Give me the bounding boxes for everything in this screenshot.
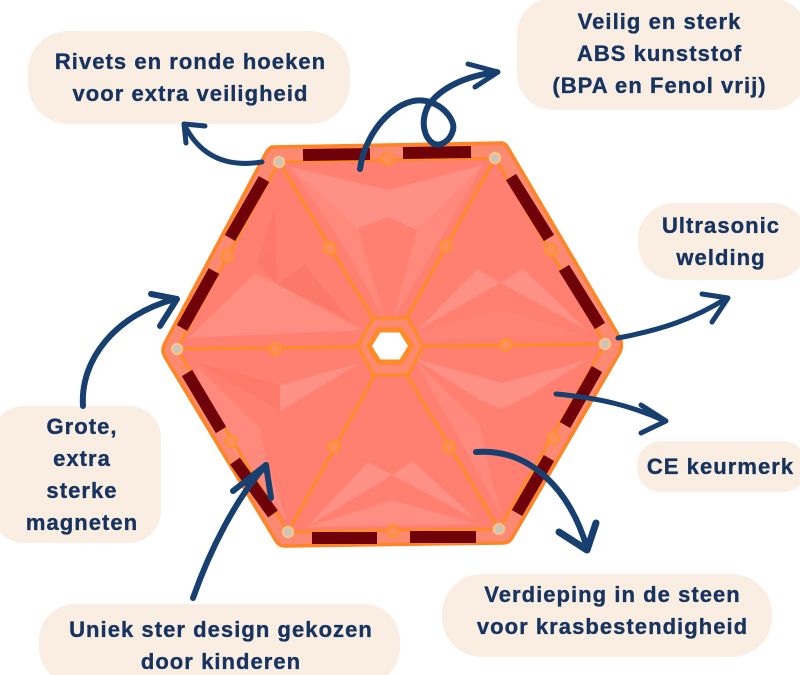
arrow: scratch resistance [476,452,596,550]
tile face [177,158,605,532]
callout: star design: door kinderen [141,648,301,674]
tile outer frame [163,143,622,546]
callout: magnets: sterke [46,478,118,503]
darker facets [198,207,350,411]
callout: magnets: Grote, [46,414,118,439]
callout: CE [637,441,800,492]
callout: CE: CE keurmerk [647,454,794,478]
rivets [172,153,610,537]
callout: star design: Uniek ster design gekozen [69,616,373,642]
callout: ABS [517,0,800,110]
callout: ABS: Veilig en sterk [578,9,741,34]
arrow: ultrasonic [618,294,728,338]
callout: ABS: ABS kunststof [577,41,742,66]
connector nodes [222,154,558,536]
arrow: magnets [83,294,177,406]
callout: scratch resistance [442,574,772,657]
callout: magnets: extra [53,446,111,471]
callout: magnets [0,406,161,543]
callout: scratch resistance: Verdieping in de steen [484,582,741,606]
central hexagon hole [358,318,423,375]
callout: ultrasonic: welding [676,244,766,270]
light facets [188,165,587,527]
arrow: CE [556,394,666,433]
callout: ultrasonic: Ultrasonic [662,212,780,238]
connector lines [177,158,605,532]
callout: rivets: Rivets en ronde hoeken [55,48,326,74]
callout: ultrasonic [638,203,800,280]
callout: rivets [28,31,350,124]
callout: magnets: magneten [26,510,138,535]
arrow: ABS [360,64,498,169]
arrow: star design [193,465,271,598]
callout: rivets: voor extra veiligheid [72,80,308,106]
magnets [182,152,600,538]
callout: ABS: (BPA en Fenol vrij) [552,73,767,98]
arrow: rivets [184,124,262,163]
callout: scratch resistance: voor krasbestendigheid [477,614,748,638]
callout: star design [39,604,400,675]
